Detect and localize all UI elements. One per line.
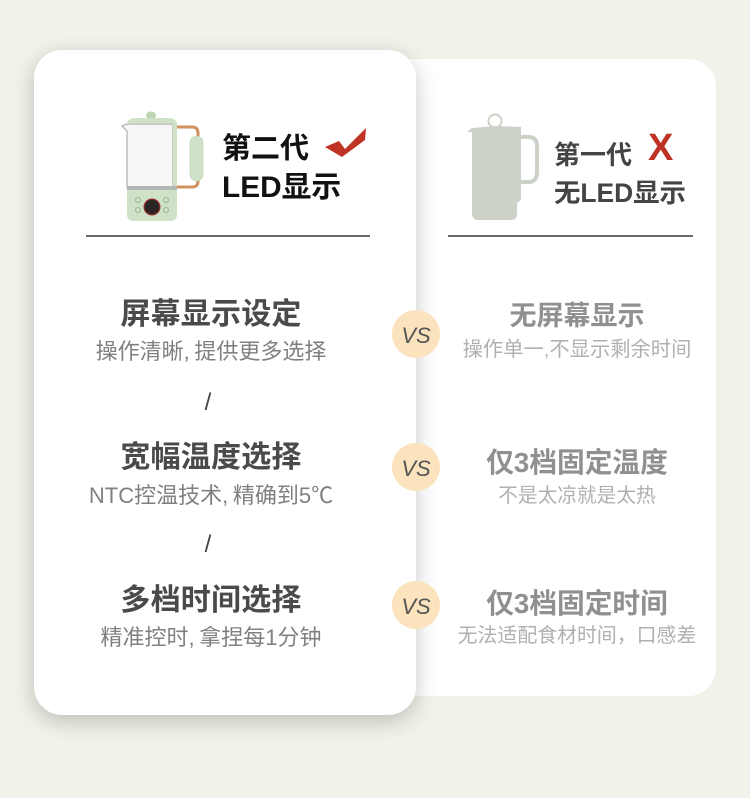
panel: second generation [34, 50, 416, 715]
heading: no LED display: 无LED显示 [554, 178, 686, 208]
feature: no screen: 无屏幕显示 [510, 301, 644, 331]
heading: second generation: 第二代 [222, 133, 309, 165]
icon: grey kettle silhouette [467, 114, 539, 220]
description: screen setting: 操作清晰, 提供更多选择 [96, 339, 326, 364]
icon: red check mark [325, 128, 366, 157]
badge: VS 1 [392, 310, 440, 358]
heading: LED display: LED显示 [222, 171, 341, 204]
separator: / [205, 389, 211, 416]
description: fixed temperature: 不是太凉就是太热 [498, 485, 656, 507]
badge: VS 3 [392, 581, 440, 629]
feature: screen setting: 屏幕显示设定 [120, 298, 302, 331]
icon: red X: X [648, 127, 673, 169]
feature: temperature selection: 宽幅温度选择 [120, 441, 302, 474]
feature: fixed temperature: 仅3档固定温度 [486, 447, 668, 478]
badge: VS 1: VS [401, 323, 431, 348]
icon: green kettle [121, 112, 204, 221]
feature: fixed time: 仅3档固定时间 [486, 588, 668, 619]
badge: VS 3: VS [401, 594, 431, 619]
panel: first generation [380, 59, 716, 696]
badge: VS 2: VS [401, 456, 431, 481]
badge: VS 2 [392, 443, 440, 491]
heading: first generation: 第一代 [554, 140, 632, 170]
divider left [86, 235, 370, 237]
separator: / [205, 531, 211, 558]
description: temperature: NTC控温技术, 精确到5℃ [89, 483, 333, 508]
feature: time selection: 多档时间选择 [120, 584, 302, 617]
divider right [448, 235, 693, 237]
description: time: 精准控时, 拿捏每1分钟 [101, 625, 321, 650]
description: no screen: 操作单一,不显示剩余时间 [463, 339, 691, 361]
description: fixed time: 无法适配食材时间，口感差 [458, 625, 696, 647]
